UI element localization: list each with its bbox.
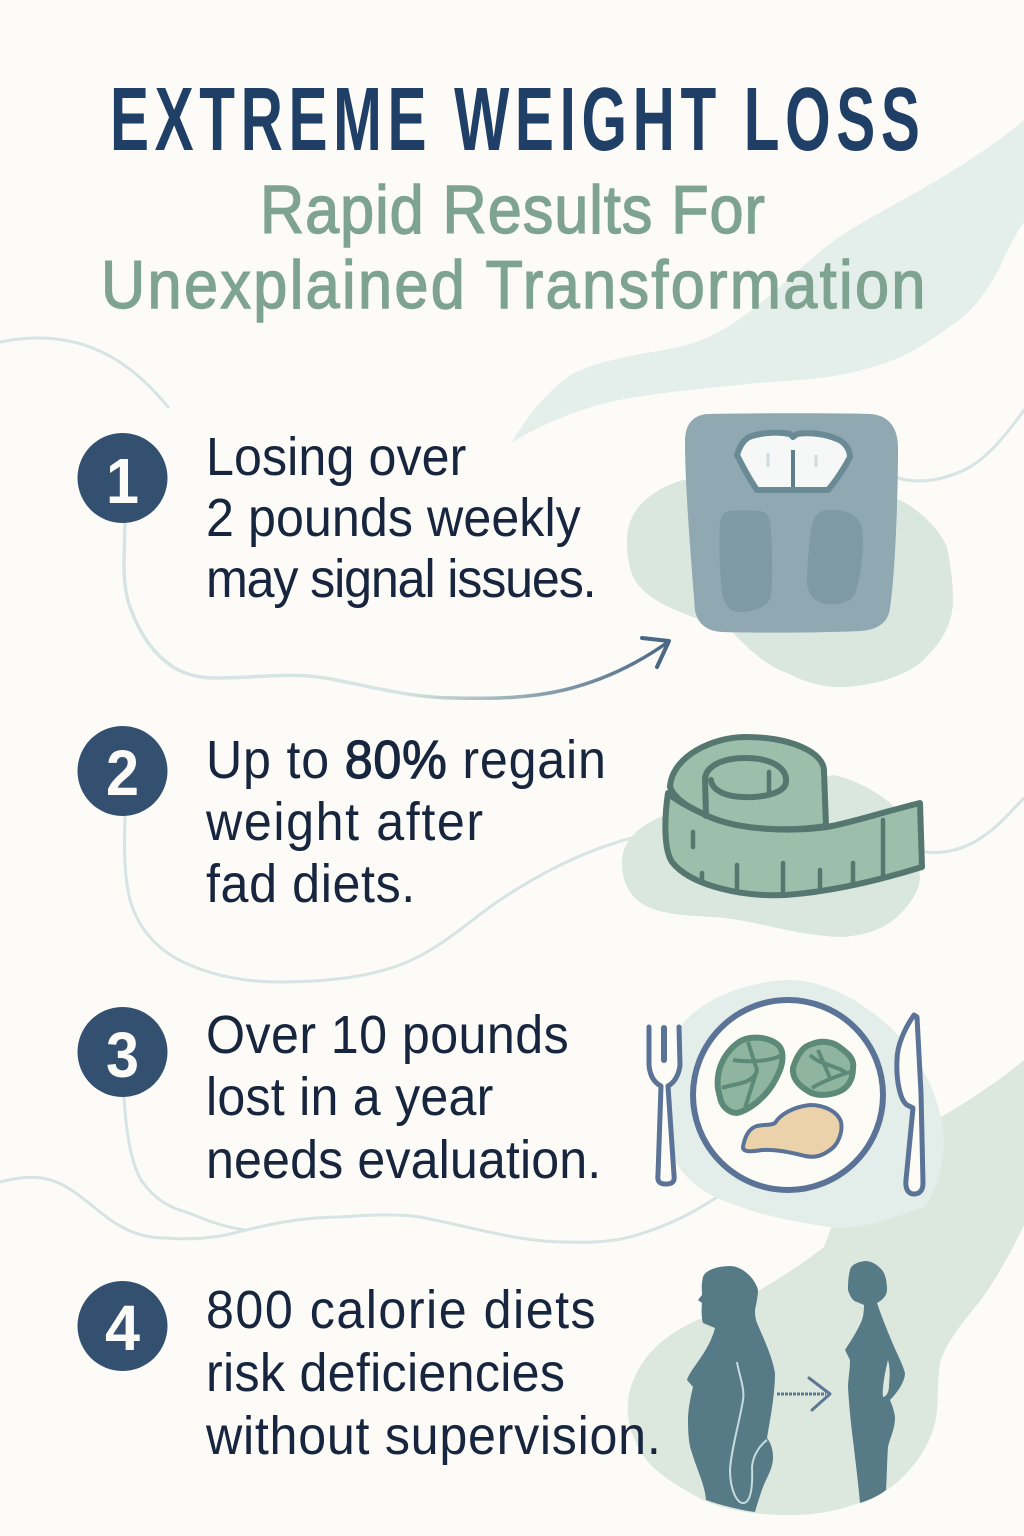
icon: measuring tape	[622, 737, 922, 937]
right foot pad	[807, 510, 863, 604]
blob behind plate	[669, 980, 944, 1228]
background wash: top right swoosh	[511, 120, 1024, 443]
icon: bathroom scale	[627, 413, 953, 687]
number badge 1: 1	[106, 445, 139, 517]
right leaf veins	[810, 1050, 850, 1088]
text block 1: Losing over	[206, 427, 466, 487]
background line: right of scale	[898, 410, 1024, 481]
text block 1: 2 pounds weekly	[206, 488, 581, 548]
text block 2: fad diets.	[206, 854, 415, 914]
after silhouette	[845, 1261, 905, 1503]
text block 3: lost in a year	[206, 1067, 493, 1127]
background wash: lower right green blob	[628, 1060, 1024, 1515]
text block 2	[205, 730, 606, 914]
left leaf veins	[722, 1042, 780, 1108]
transition arrow	[777, 1378, 830, 1410]
text block 3: needs evaluation.	[206, 1130, 601, 1190]
connector: step 2 to tape	[125, 816, 640, 982]
blob behind tape	[622, 775, 920, 937]
scale needle	[791, 450, 795, 487]
number badge 3: 3	[106, 1019, 139, 1091]
number badge 2	[78, 726, 168, 816]
text block 4: without supervision.	[205, 1406, 661, 1466]
before arm outline	[730, 1362, 767, 1503]
arm gap	[883, 1360, 890, 1397]
title: EXTREME WEIGHT LOSS	[110, 69, 920, 170]
blob behind scale	[627, 480, 953, 687]
scale display	[737, 433, 850, 490]
background line: top left	[0, 338, 168, 407]
text block 2: weight after	[205, 792, 483, 852]
number badge 4	[78, 1281, 168, 1371]
step 4	[78, 1280, 661, 1466]
before silhouette	[687, 1266, 775, 1512]
tape strip	[665, 793, 922, 895]
fork	[649, 1027, 680, 1184]
text block 4	[205, 1280, 661, 1466]
number badge 2: 2	[106, 737, 139, 809]
right leaf	[793, 1042, 853, 1095]
background line: right of tape	[925, 798, 1024, 852]
connector arrow: step 1 to scale	[124, 523, 669, 698]
number badge 3	[78, 1007, 168, 1097]
text block 1: may signal issues.	[206, 549, 597, 609]
icon: plate with cutlery	[649, 980, 944, 1228]
dial marks	[768, 453, 816, 467]
fork centre tine	[661, 1028, 667, 1060]
coil inner spiral	[705, 758, 786, 816]
icon: before and after silhouettes	[687, 1261, 905, 1512]
number badge 1	[78, 433, 168, 523]
tape ticks	[693, 772, 883, 892]
subtitle: Unexplained Transformation	[101, 246, 925, 323]
text block 3: Over 10 pounds	[206, 1005, 569, 1065]
text block 2: Up to 80% regain	[206, 730, 606, 790]
step 3	[78, 1005, 601, 1190]
subtitle	[101, 171, 925, 323]
scale body	[685, 413, 898, 633]
connector: step 3 and wave line	[0, 1097, 717, 1242]
text block 1	[206, 427, 597, 609]
tape coil	[670, 737, 826, 829]
step 2	[78, 726, 606, 914]
left leaf	[718, 1038, 783, 1113]
number badge 4: 4	[105, 1292, 140, 1364]
left foot pad	[719, 510, 772, 612]
knife	[897, 1015, 923, 1194]
step 1	[78, 427, 597, 609]
subtitle: Rapid Results For	[260, 171, 765, 248]
text block 4: 800 calorie diets	[206, 1280, 596, 1340]
text block 4: risk deficiencies	[206, 1343, 565, 1403]
chicken	[743, 1105, 841, 1157]
plate	[693, 1000, 883, 1190]
text block 3	[206, 1005, 601, 1190]
